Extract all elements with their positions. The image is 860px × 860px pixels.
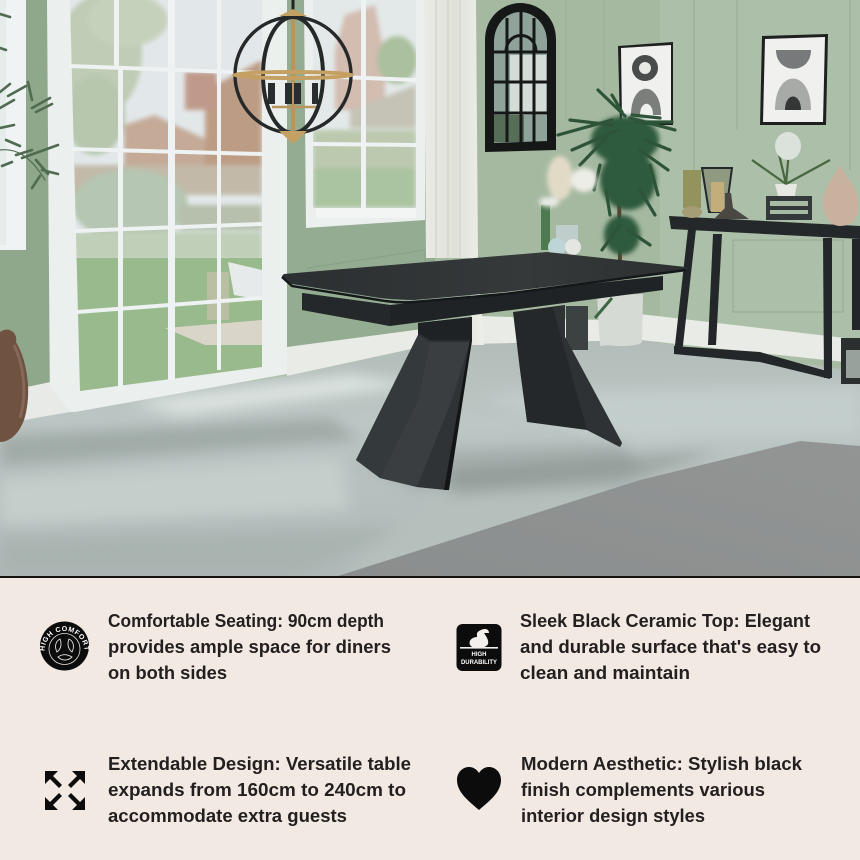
wall (0, 0, 860, 400)
garden view through window (70, 0, 262, 391)
feature: comfortable seating (40, 610, 391, 683)
panel: room photo (0, 0, 860, 576)
apron (302, 276, 663, 326)
icon: high comfort badge: HIGH COMFORT (40, 626, 90, 651)
white patterned planter (595, 294, 643, 346)
feature: extendable design (45, 753, 411, 826)
text: sleek ceramic top: clean and maintain (520, 662, 690, 683)
chandelier (234, 0, 352, 144)
icon: high durability: HIGH (472, 652, 486, 658)
feature: modern aesthetic (457, 753, 803, 826)
text: sleek ceramic top (520, 610, 821, 683)
text: comfortable seating: Comfortable Seating: 90cm depth (108, 610, 384, 631)
text: modern aesthetic (521, 753, 803, 826)
text: extendable design (108, 753, 411, 826)
text: extendable design: expands from 160cm to 240cm to (108, 779, 406, 800)
feature: sleek ceramic top (456, 610, 821, 683)
text: comfortable seating: provides ample space for diners (108, 636, 391, 657)
lantern on the floor (566, 306, 588, 350)
floor (0, 340, 860, 576)
icon: high durability (456, 624, 502, 671)
text: comfortable seating (108, 610, 391, 683)
right window (304, 0, 425, 228)
icon: high durability: DURABILITY (461, 660, 497, 666)
console decor (682, 132, 858, 226)
large window (24, 0, 287, 420)
baseboards (28, 314, 844, 391)
shadow under table (400, 441, 631, 491)
icon: heart (457, 767, 501, 810)
icon: expand arrows (45, 771, 85, 810)
dining table (282, 252, 687, 490)
ceramic tabletop (282, 252, 687, 302)
text: extendable design: Extendable Design: Versatile table (108, 753, 411, 774)
framed print right (760, 34, 828, 125)
text: comfortable seating: on both sides (108, 662, 227, 683)
text: sleek ceramic top: and durable surface that's easy to (520, 636, 821, 657)
clay vase (0, 330, 28, 442)
console table (669, 216, 860, 379)
framed print left (618, 42, 673, 125)
text: extendable design: accommodate extra guests (108, 805, 347, 826)
floor lantern right (841, 338, 860, 384)
text: modern aesthetic: interior design styles (521, 805, 705, 826)
text: modern aesthetic: Modern Aesthetic: Stylish black (521, 753, 803, 774)
curtain (424, 0, 484, 345)
panel: feature strip (40, 610, 821, 826)
front leg (356, 317, 472, 490)
left small window (0, 0, 26, 250)
rear leg (513, 305, 622, 447)
olive branch plant (0, 14, 58, 188)
divider line (0, 576, 860, 578)
arched mirror (485, 3, 556, 152)
icon: high comfort badge (40, 622, 90, 670)
text: modern aesthetic: finish complements various (521, 779, 765, 800)
rug (338, 441, 860, 576)
tall indoor plant (558, 90, 675, 262)
flower vases (539, 156, 597, 256)
text: sleek ceramic top: Sleek Black Ceramic Top: Elegant (520, 610, 810, 631)
